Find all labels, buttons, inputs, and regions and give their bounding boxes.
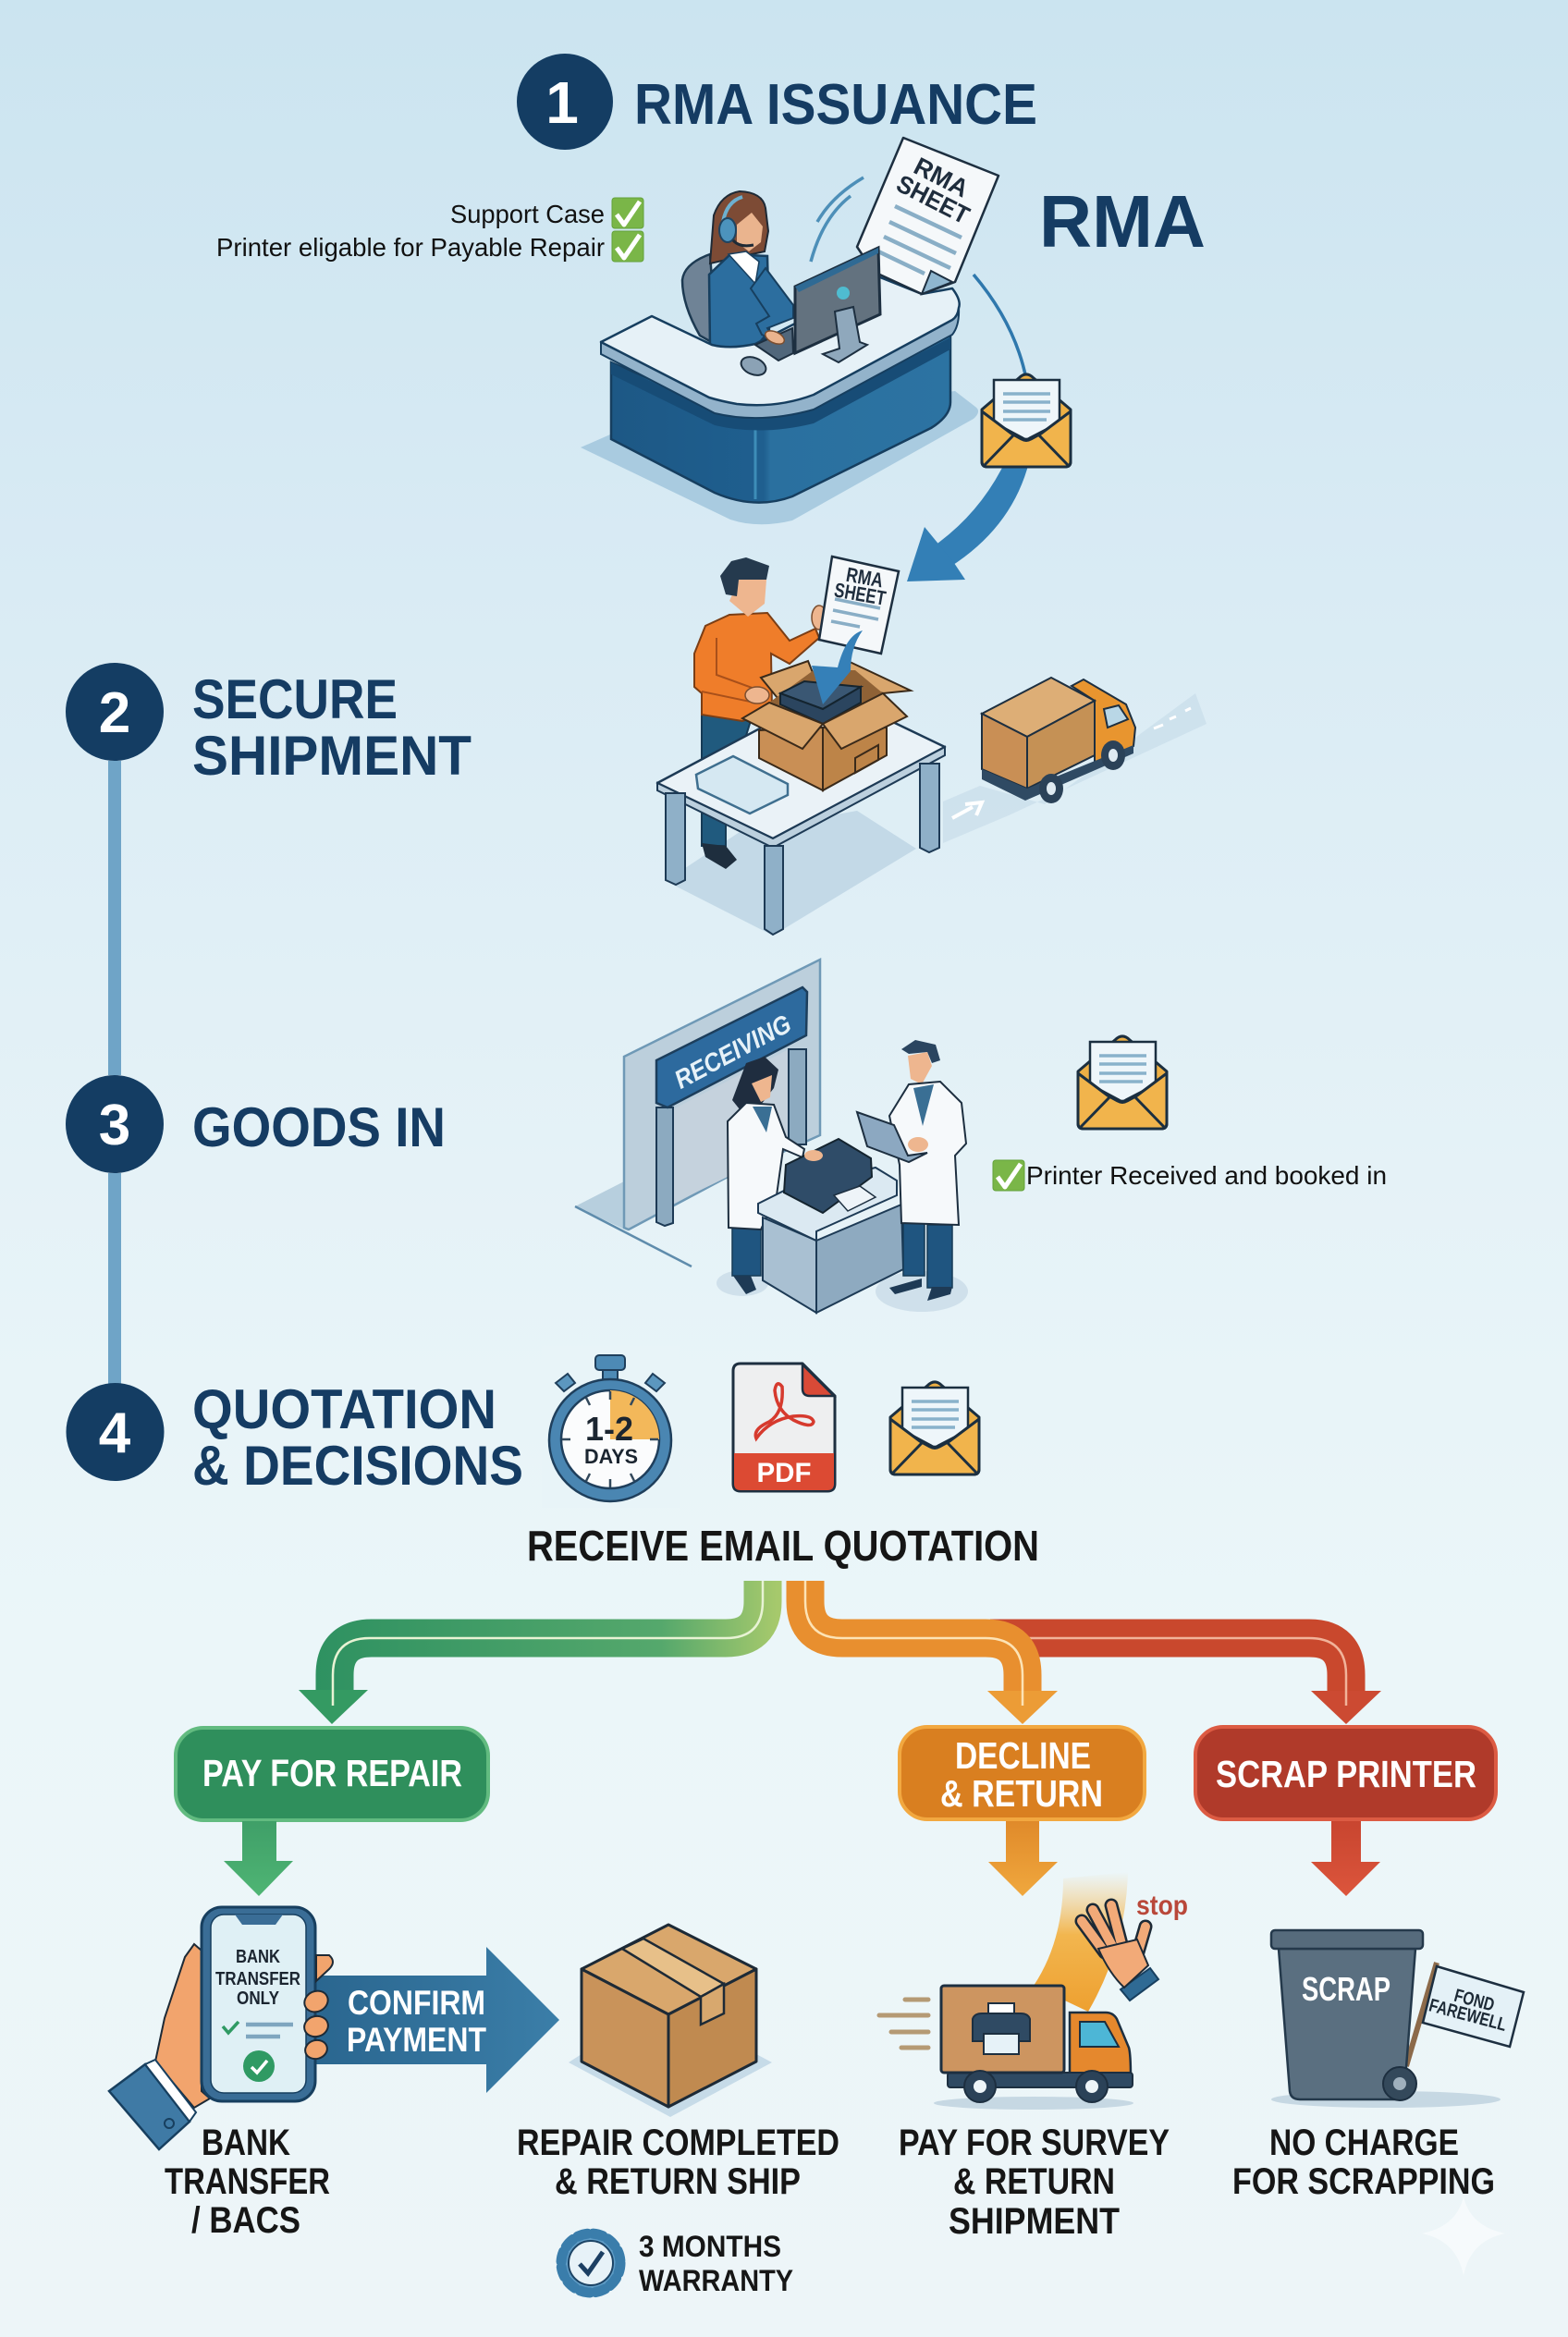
step 3 badge bbox=[66, 1075, 164, 1173]
icon: PDF file bbox=[733, 1364, 835, 1491]
woman bbox=[728, 1057, 804, 1294]
arrow: confirm payment bbox=[314, 1947, 559, 2093]
laptop bbox=[857, 1112, 927, 1162]
printer in box bbox=[780, 681, 861, 709]
heading: goods in: GOODS IN bbox=[192, 1096, 446, 1158]
arrow: confirm payment: CONFIRM bbox=[348, 1984, 485, 2022]
sheet held by person: RMA bbox=[844, 563, 885, 592]
box back flaps bbox=[761, 661, 911, 703]
illustration: packing at table bbox=[657, 557, 1207, 936]
box inside bbox=[769, 670, 883, 724]
timeline connector bbox=[108, 761, 121, 1384]
man bbox=[857, 1040, 966, 1301]
heading: receive email quotation: RECEIVE EMAIL QUOTATION bbox=[527, 1522, 1039, 1570]
illustration: hand holding phone: TRANSFER bbox=[215, 1969, 300, 1989]
label: pay for survey: SHIPMENT bbox=[949, 2201, 1120, 2242]
illustration: repaired parcel bbox=[569, 1925, 772, 2117]
illustration: support agent at desk bbox=[581, 177, 978, 524]
option: pay for repair bbox=[176, 1728, 488, 1820]
arrow: to pay for repair bbox=[299, 1581, 763, 1724]
label: pay for survey: PAY FOR SURVEY bbox=[899, 2123, 1170, 2163]
table top bbox=[657, 691, 945, 838]
icon: PDF file: PDF bbox=[756, 1458, 812, 1488]
step 1 badge bbox=[517, 54, 613, 150]
illustration: hand holding phone bbox=[109, 1907, 333, 2149]
illustration: scrap bin with flag bbox=[1271, 1930, 1524, 2108]
delivery truck bbox=[952, 678, 1191, 818]
bin lid bbox=[1271, 1930, 1423, 1949]
label: pay for survey bbox=[899, 2123, 1170, 2242]
heading: quotation and decisions: & DECISIONS bbox=[192, 1435, 523, 1497]
option: decline and return bbox=[900, 1727, 1145, 1819]
paper: RMA sheet: SHEET bbox=[892, 170, 974, 230]
icon: email envelope 2 bbox=[1078, 1036, 1167, 1129]
illustration: hand holding phone: BANK bbox=[236, 1947, 280, 1967]
speed lines bbox=[879, 2000, 928, 2048]
hand palm bbox=[155, 1944, 210, 2108]
chair bbox=[682, 254, 717, 345]
heading: secure shipment bbox=[192, 668, 472, 787]
icon: stopwatch 1-2 days: DAYS bbox=[584, 1445, 638, 1468]
desk top bbox=[601, 277, 960, 405]
heading: quotation and decisions bbox=[192, 1378, 523, 1497]
option: scrap printer: SCRAP PRINTER bbox=[1216, 1753, 1476, 1795]
option: scrap printer bbox=[1195, 1727, 1496, 1819]
phone bbox=[202, 1907, 315, 2101]
RMA large label: RMA bbox=[1039, 180, 1206, 263]
label: no charge bbox=[1232, 2123, 1495, 2202]
bin wheel bbox=[1383, 2067, 1416, 2100]
illustration: hand holding phone: ONLY bbox=[237, 1988, 280, 2009]
fingers bbox=[316, 1955, 333, 1981]
swoosh behind truck bbox=[1034, 1872, 1128, 2012]
arrow: repair down bbox=[224, 1821, 293, 1896]
floor bbox=[575, 1181, 629, 1231]
printer on counter bbox=[784, 1139, 872, 1213]
arrow: RMA emailed to customer bbox=[907, 275, 1029, 581]
icon: warranty badge bbox=[561, 2233, 620, 2293]
bubble wrap bbox=[696, 756, 788, 814]
step 4 badge: 4 bbox=[99, 1401, 131, 1465]
cargo box bbox=[941, 1986, 1064, 2073]
heading: secure shipment: SECURE bbox=[192, 668, 398, 730]
receiving sign bbox=[656, 987, 807, 1107]
icon: email envelope 3 bbox=[890, 1382, 979, 1474]
pillars bbox=[656, 1049, 806, 1226]
counter bbox=[763, 1217, 816, 1313]
sheet held by person bbox=[819, 557, 899, 654]
step 2 badge: 2 bbox=[99, 681, 130, 745]
option: decline and return: & RETURN bbox=[940, 1772, 1103, 1815]
headset bbox=[719, 197, 753, 246]
gate panel bbox=[624, 960, 820, 1230]
agent arm bbox=[751, 268, 793, 340]
watermark sparkle bbox=[1422, 2196, 1505, 2276]
monitor bbox=[795, 248, 880, 362]
hand holding sheet bbox=[812, 606, 827, 630]
arrow: decline down bbox=[988, 1821, 1058, 1896]
stop label: stop bbox=[1136, 1890, 1188, 1921]
heading: quotation and decisions: QUOTATION bbox=[192, 1378, 496, 1440]
desk edge bbox=[601, 308, 959, 418]
label: warranty bbox=[639, 2230, 793, 2297]
box front flaps bbox=[742, 693, 907, 749]
woman hand bbox=[804, 1150, 823, 1161]
step 2 badge bbox=[66, 663, 164, 761]
arrow: scrap down bbox=[1311, 1821, 1380, 1896]
label: no charge: FOR SCRAPPING bbox=[1232, 2161, 1495, 2202]
paper: RMA sheet: RMA bbox=[910, 153, 974, 202]
arrow into box bbox=[812, 630, 863, 704]
person body bbox=[694, 613, 819, 721]
sleeve bbox=[109, 2064, 190, 2149]
label: repair completed: REPAIR COMPLETED bbox=[517, 2123, 839, 2163]
note: printer received: Printer Received and booked in bbox=[1026, 1161, 1387, 1190]
agent hair bbox=[710, 191, 768, 263]
support case checklist bbox=[216, 198, 643, 262]
paper: RMA sheet bbox=[857, 138, 998, 294]
illustration: return truck bbox=[879, 1986, 1133, 2110]
step 4 badge bbox=[67, 1383, 165, 1481]
illustration: receiving area bbox=[575, 960, 968, 1313]
step 1 badge: 1 bbox=[545, 69, 579, 136]
hand on box bbox=[745, 687, 769, 704]
option: decline and return: DECLINE bbox=[955, 1734, 1091, 1777]
illustration: scrap bin with flag: SCRAP bbox=[1302, 1970, 1390, 2008]
box body bbox=[759, 728, 823, 790]
desk base bbox=[611, 333, 950, 503]
icon: stop hand bbox=[1082, 1905, 1158, 2001]
flag: FOND bbox=[1452, 1986, 1497, 2016]
label: warranty: 3 MONTHS bbox=[639, 2230, 781, 2263]
label: warranty: WARRANTY bbox=[639, 2264, 793, 2297]
icon: stopwatch 1-2 days bbox=[542, 1346, 680, 1508]
heading: RMA issuance: RMA ISSUANCE bbox=[634, 73, 1037, 137]
person legs bbox=[702, 712, 753, 823]
cab bbox=[1070, 2013, 1131, 2077]
motion lines bbox=[811, 177, 864, 262]
icon: stopwatch 1-2 days: 1-2 bbox=[585, 1410, 633, 1448]
road bbox=[943, 693, 1207, 843]
shadows bbox=[717, 1270, 768, 1296]
person head bbox=[729, 580, 766, 617]
agent torso bbox=[709, 254, 769, 348]
label: pay for survey: & RETURN bbox=[953, 2161, 1115, 2202]
arrow: to decline and return bbox=[805, 1581, 1058, 1724]
keyboard and mouse bbox=[755, 328, 793, 361]
receiving sign: RECEIVING bbox=[669, 1009, 796, 1095]
option: pay for repair: PAY FOR REPAIR bbox=[202, 1752, 462, 1794]
heading: secure shipment: SHIPMENT bbox=[192, 725, 472, 787]
flag: FAREWELL bbox=[1427, 1995, 1509, 2036]
wheels bbox=[964, 2071, 996, 2102]
icon: email envelope 1 bbox=[982, 374, 1071, 467]
label: no charge: NO CHARGE bbox=[1269, 2123, 1459, 2163]
table shadow bbox=[666, 811, 916, 936]
bin body bbox=[1279, 1949, 1415, 2099]
printer on cargo bbox=[973, 2003, 1030, 2054]
label: bank transfer / BACS: TRANSFER bbox=[165, 2161, 330, 2202]
agent face bbox=[737, 213, 763, 251]
step 3 badge: 3 bbox=[99, 1094, 130, 1157]
support case checklist: Support Case bbox=[450, 200, 605, 228]
label: repair completed: & RETURN SHIP bbox=[555, 2161, 801, 2202]
label: bank transfer / BACS: / BACS bbox=[191, 2200, 300, 2241]
table legs bbox=[666, 764, 939, 935]
arrow: to scrap printer bbox=[990, 1638, 1381, 1724]
label: repair completed bbox=[517, 2123, 839, 2202]
flag bbox=[1406, 1963, 1524, 2066]
label: bank transfer / BACS bbox=[165, 2123, 330, 2241]
support case checklist: Printer eligable for Payable Repair bbox=[216, 233, 605, 262]
label: bank transfer / BACS: BANK bbox=[202, 2123, 290, 2163]
chassis bbox=[948, 2073, 1133, 2087]
sheet held by person: SHEET bbox=[833, 578, 888, 610]
arrow: confirm payment: PAYMENT bbox=[347, 2021, 486, 2059]
